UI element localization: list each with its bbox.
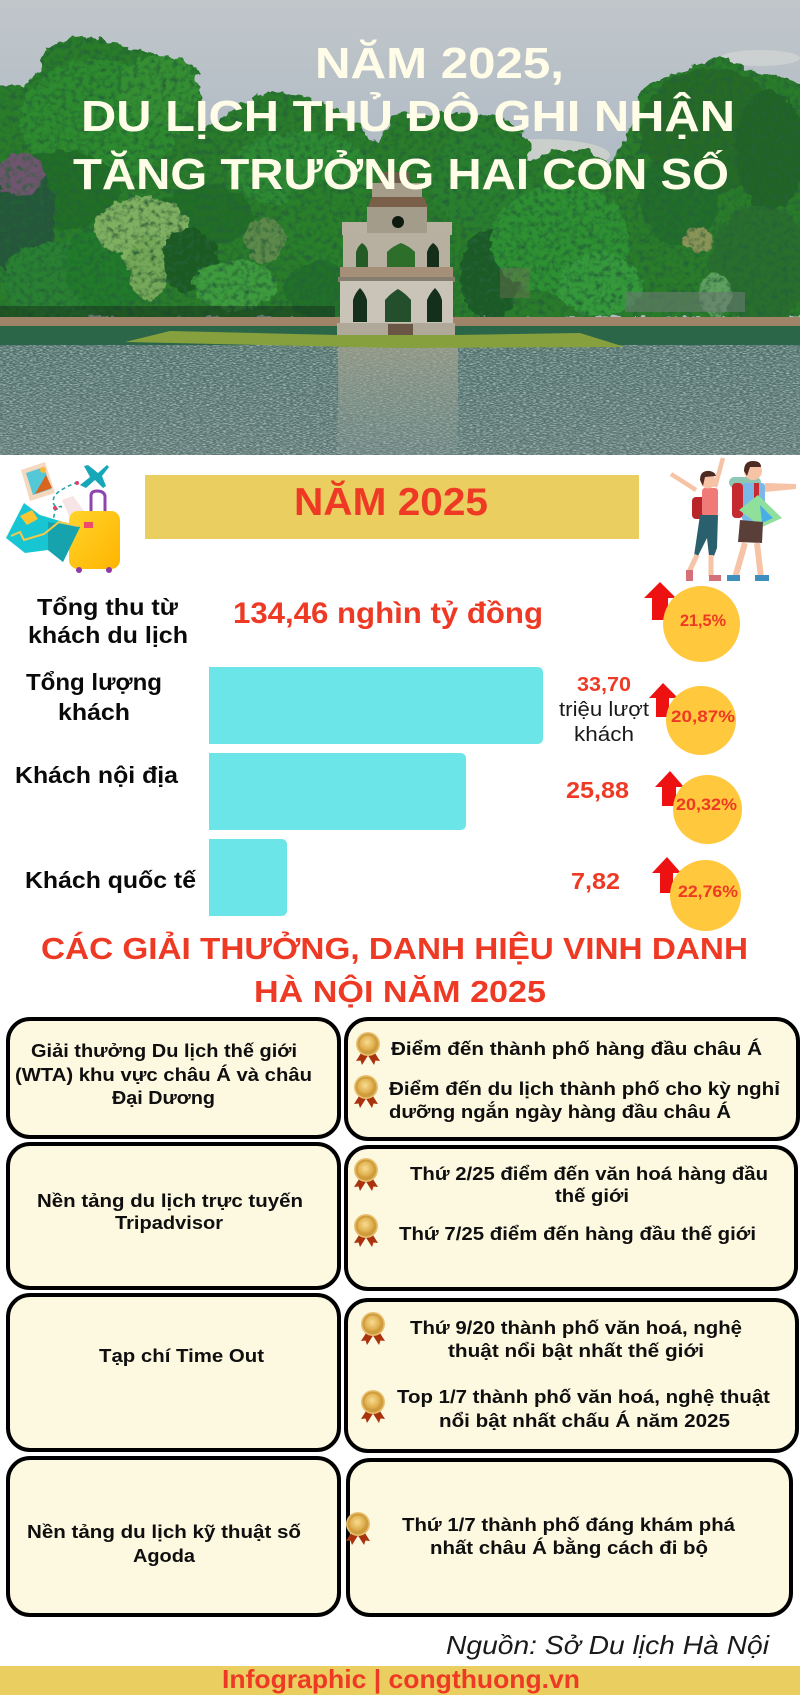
award text: Top 1/7 thành phố văn hoá, nghệ thuật xyxy=(397,1386,770,1407)
badge: 20,32%: 20,32% xyxy=(676,795,737,814)
award row 4: left panel: Nền tảng du lịch kỹ thuật số xyxy=(27,1521,301,1542)
award row 1: left panel: Đại Dương xyxy=(112,1087,215,1108)
row: total visitors xyxy=(26,667,736,755)
icon: two tourists with map xyxy=(671,458,796,581)
section heading: awards: HÀ NỘI NĂM 2025 xyxy=(254,973,546,1009)
award row 1: left panel: (WTA) khu vực châu Á và châu xyxy=(15,1064,312,1085)
value: international visitors: 7,82 xyxy=(571,868,620,894)
badge: 20,32% xyxy=(673,775,742,844)
badge: 22,76%: 22,76% xyxy=(678,882,738,901)
award row 4: left panel xyxy=(8,1458,339,1615)
icon: medal xyxy=(356,1032,380,1065)
value: total visitors: 33,70 xyxy=(577,674,631,696)
footer band: Infographic | congthuong.vn xyxy=(222,1664,580,1694)
award text: nổi bật nhất chấu Á năm 2025 xyxy=(439,1410,730,1431)
title: TĂNG TRƯỞNG HAI CON SỐ xyxy=(73,148,729,199)
award text: Thứ 7/25 điểm đến hàng đầu thế giới xyxy=(399,1223,756,1244)
icon: medal xyxy=(354,1214,378,1247)
label: domestic visitors: Khách nội địa xyxy=(15,762,178,788)
award text: Thứ 1/7 thành phố đáng khám phá xyxy=(402,1514,736,1535)
award row 3: left panel: Tạp chí Time Out xyxy=(99,1345,264,1366)
label: total visitors: Tổng lượng xyxy=(26,669,162,695)
award text xyxy=(402,1514,736,1558)
row: tourism revenue xyxy=(28,582,740,662)
badge: 21,5%: 21,5% xyxy=(680,611,726,630)
award text xyxy=(397,1386,770,1431)
arrow: domestic up xyxy=(655,771,684,806)
award row 1: left panel xyxy=(8,1019,339,1137)
award text xyxy=(410,1163,768,1206)
section heading: awards: CÁC GIẢI THƯỞNG, DANH HIỆU VINH DANH xyxy=(41,930,748,966)
award text xyxy=(410,1317,742,1361)
label: revenue: khách du lịch xyxy=(28,622,188,648)
value: total visitors xyxy=(559,674,649,746)
banner xyxy=(145,475,639,539)
value: domestic visitors: 25,88 xyxy=(566,777,629,803)
title: DU LỊCH THỦ ĐÔ GHI NHẬN xyxy=(81,90,735,141)
award row 3: right panel xyxy=(346,1300,797,1451)
award text: Thứ 2/25 điểm đến văn hoá hàng đầu xyxy=(410,1163,768,1184)
bar: domestic visitors xyxy=(209,753,466,830)
value: revenue: 134,46 nghìn tỷ đồng xyxy=(233,597,543,630)
badge: 21,5% xyxy=(663,586,740,662)
label: total visitors xyxy=(26,669,162,725)
Turtle Tower xyxy=(337,172,455,335)
section heading: awards xyxy=(41,930,748,1009)
award row 4: right panel xyxy=(346,1460,791,1615)
footer band xyxy=(0,1664,800,1695)
badge: 22,76% xyxy=(670,860,741,931)
row: international visitors xyxy=(25,839,741,931)
award text: nhất châu Á bằng cách đi bộ xyxy=(430,1537,708,1558)
label: international visitors: Khách quốc tế xyxy=(25,867,196,893)
badge: 20,87%: 20,87% xyxy=(671,707,735,726)
icon: medal xyxy=(354,1158,378,1191)
award text: dưỡng ngắn ngày hàng đầu châu Á xyxy=(389,1101,731,1122)
arrow: total visitors up xyxy=(649,683,678,717)
icon: medal xyxy=(354,1075,378,1108)
label: revenue xyxy=(28,594,188,648)
award row 2: left panel: Nền tảng du lịch trực tuyến xyxy=(37,1190,303,1211)
award row 1: left panel: Giải thưởng Du lịch thế giới xyxy=(31,1040,297,1061)
icon: medal xyxy=(361,1390,385,1423)
arrow: international up xyxy=(652,857,681,893)
title xyxy=(73,38,735,199)
icon: travel luggage, map, photo and plane xyxy=(6,462,120,573)
icon: medal xyxy=(361,1312,385,1345)
award text: thuật nổi bật nhất thế giới xyxy=(448,1340,704,1361)
title: NĂM 2025, xyxy=(315,38,564,88)
row: domestic visitors xyxy=(15,753,742,844)
award text: thế giới xyxy=(555,1185,629,1206)
hero photo: Hoan Kiem lake and Turtle Tower xyxy=(0,0,800,455)
award text xyxy=(389,1078,780,1122)
award row 4: left panel: Agoda xyxy=(133,1545,196,1566)
award row 2: left panel xyxy=(8,1144,339,1288)
award text: Thứ 9/20 thành phố văn hoá, nghệ xyxy=(410,1317,742,1338)
bar: international visitors xyxy=(209,839,287,916)
icon: medal xyxy=(346,1512,370,1545)
source note: Nguồn: Sở Du lịch Hà Nội xyxy=(446,1630,770,1660)
award row 2: left panel: Tripadvisor xyxy=(115,1212,223,1233)
bar: total visitors xyxy=(209,667,543,744)
label: total visitors: khách xyxy=(58,699,130,725)
banner heading: NĂM 2025 xyxy=(294,480,488,524)
award row 3: left panel xyxy=(8,1295,339,1450)
label: revenue: Tổng thu từ xyxy=(37,594,178,620)
arrow: revenue up xyxy=(644,582,676,620)
value: total visitors: triệu lượt xyxy=(559,699,649,721)
award text: Điểm đến thành phố hàng đầu châu Á xyxy=(391,1038,762,1059)
badge: 20,87% xyxy=(666,686,736,755)
award row 1: right panel xyxy=(346,1019,798,1139)
award text: Điểm đến du lịch thành phố cho kỳ nghỉ xyxy=(389,1078,780,1099)
award row 2: right panel xyxy=(346,1147,796,1289)
value: total visitors: khách xyxy=(574,724,634,746)
